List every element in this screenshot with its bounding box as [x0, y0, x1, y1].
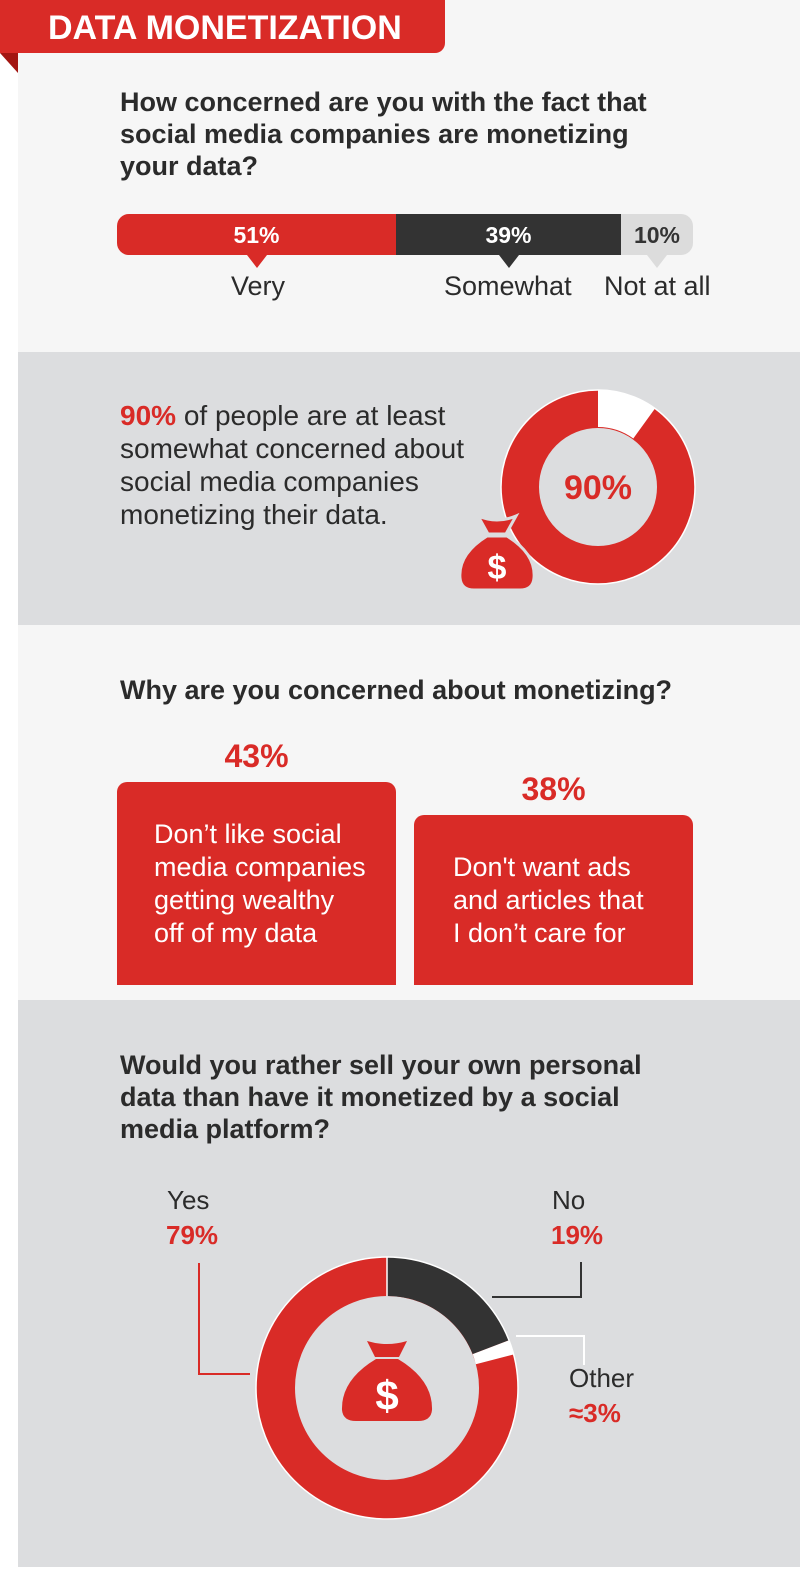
icon: money bag: $ [488, 549, 507, 587]
question 3: data than have it monetized by a social [120, 1082, 620, 1112]
donut chart: sell data: ≈3% [569, 1398, 621, 1428]
bar labels: Somewhat [444, 271, 572, 301]
header banner [0, 0, 445, 53]
bar labels: Not at all [604, 271, 711, 301]
box: wealthy: off of my data [154, 918, 317, 948]
panel: top [18, 0, 800, 352]
stacked bar: 39% [485, 222, 532, 248]
box: wealthy: media companies [154, 852, 366, 882]
donut chart 90%: 90% [564, 469, 632, 507]
donut chart: sell data: $ [375, 1372, 399, 1419]
panel: why concerned [18, 625, 800, 1000]
stacked bar: 51% [233, 222, 280, 248]
donut chart: sell data: Other [569, 1363, 634, 1393]
donut chart 90% [500, 389, 696, 585]
stat text: somewhat concerned about [120, 433, 464, 464]
panel: 90% [18, 352, 800, 625]
question 1: your data? [120, 151, 258, 181]
center money bag [367, 1341, 407, 1357]
stat text: social media companies [120, 466, 419, 497]
stat: 43%: 43% [224, 738, 289, 774]
box: ads: and articles that [453, 885, 644, 915]
header banner: DATA MONETIZATION [48, 9, 402, 47]
stat text: monetizing their data. [120, 499, 388, 530]
question 1 [120, 87, 647, 181]
box: wealthy [117, 782, 396, 985]
box: wealthy: Don’t like social [154, 819, 342, 849]
stat text [120, 400, 464, 530]
box: wealthy: getting wealthy [154, 885, 334, 915]
question 2: Why are you concerned about monetizing? [120, 675, 672, 705]
donut chart: sell data: No [552, 1185, 585, 1215]
box: ads: Don't want ads [453, 852, 631, 882]
question 3: media platform? [120, 1114, 330, 1144]
box: ads: I don’t care for [453, 918, 626, 948]
stat: 38%: 38% [521, 771, 586, 807]
donut chart: sell data [166, 1185, 634, 1520]
stacked bar: 10% [634, 222, 680, 248]
question 3: Would you rather sell your own personal [120, 1050, 642, 1080]
icon: money bag [461, 512, 533, 588]
labels: Yes [167, 1185, 209, 1215]
donut chart: sell data: 19% [551, 1220, 603, 1250]
banner fold [0, 53, 18, 73]
panel: sell data [18, 1000, 800, 1567]
stacked bar [117, 214, 693, 268]
bar labels: Very [231, 271, 285, 301]
question 1: How concerned are you with the fact that [120, 87, 647, 117]
box: ads [414, 815, 693, 985]
stat text: 90% of people are at least [120, 400, 445, 431]
bar labels [231, 271, 711, 301]
leader lines [199, 1263, 250, 1374]
donut chart: sell data: 79% [166, 1220, 218, 1250]
question 1: social media companies are monetizing [120, 119, 629, 149]
question 3 [120, 1050, 642, 1144]
